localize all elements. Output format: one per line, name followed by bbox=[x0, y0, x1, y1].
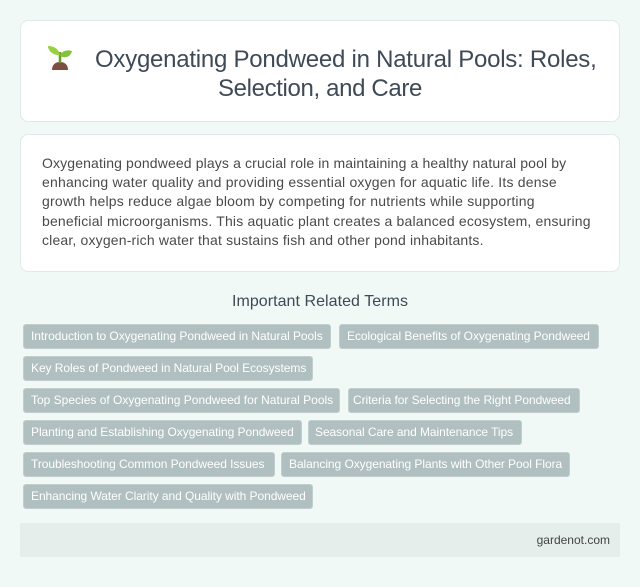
tag: Introduction to Oxygenating Pondweed in Natural Pools bbox=[31, 329, 323, 343]
footer bbox=[20, 523, 620, 557]
text block: introduction: clear, oxygen-rich water that sustains fish and other pond inhabitants. bbox=[42, 232, 484, 248]
tag bbox=[23, 452, 275, 477]
text block: introduction bbox=[42, 154, 591, 248]
tag: Ecological Benefits of Oxygenating Pondweed bbox=[347, 329, 590, 343]
panel: related term tags bbox=[23, 324, 599, 509]
tag bbox=[339, 324, 599, 349]
tag: Top Species of Oxygenating Pondweed for Natural Pools bbox=[31, 393, 333, 407]
tag bbox=[281, 452, 570, 477]
panel: header bbox=[20, 20, 620, 122]
tag bbox=[23, 420, 302, 445]
tag: Criteria for Selecting the Right Pondweed bbox=[353, 393, 571, 407]
tag: Planting and Establishing Oxygenating Pondweed bbox=[31, 425, 294, 439]
tag bbox=[23, 356, 313, 381]
tag: Seasonal Care and Maintenance Tips bbox=[315, 425, 513, 439]
text block: introduction: Oxygenating pondweed plays a crucial role in maintaining a healthy natural pool by bbox=[42, 154, 566, 170]
tag: Troubleshooting Common Pondweed Issues bbox=[31, 457, 264, 471]
tag: Key Roles of Pondweed in Natural Pool Ecosystems bbox=[31, 361, 306, 375]
text block: introduction: growth helps reduce algae bloom by competing for nutrients while supporting bbox=[42, 193, 535, 209]
title: Oxygenating Pondweed in Natural Pools: Roles, bbox=[95, 46, 596, 73]
text block: introduction: enhancing water quality and providing essential oxygen for aquatic life. Its dense bbox=[42, 174, 557, 190]
title bbox=[95, 46, 596, 102]
title: Selection, and Care bbox=[218, 75, 422, 102]
tag bbox=[23, 324, 331, 349]
icon: seedling bbox=[48, 46, 72, 70]
tag bbox=[23, 388, 340, 413]
tag bbox=[308, 420, 522, 445]
tag: Enhancing Water Clarity and Quality with Pondweed bbox=[31, 489, 306, 503]
footer: gardenot.com bbox=[537, 533, 610, 547]
heading: related terms: Important Related Terms bbox=[232, 293, 408, 310]
tag bbox=[23, 484, 313, 509]
panel: introduction bbox=[20, 134, 620, 272]
tag bbox=[348, 388, 580, 413]
text block: introduction: beneficial microorganisms. This aquatic plant creates a balanced ecosystem, ensuring bbox=[42, 213, 591, 229]
tag: Balancing Oxygenating Plants with Other Pool Flora bbox=[289, 457, 562, 471]
